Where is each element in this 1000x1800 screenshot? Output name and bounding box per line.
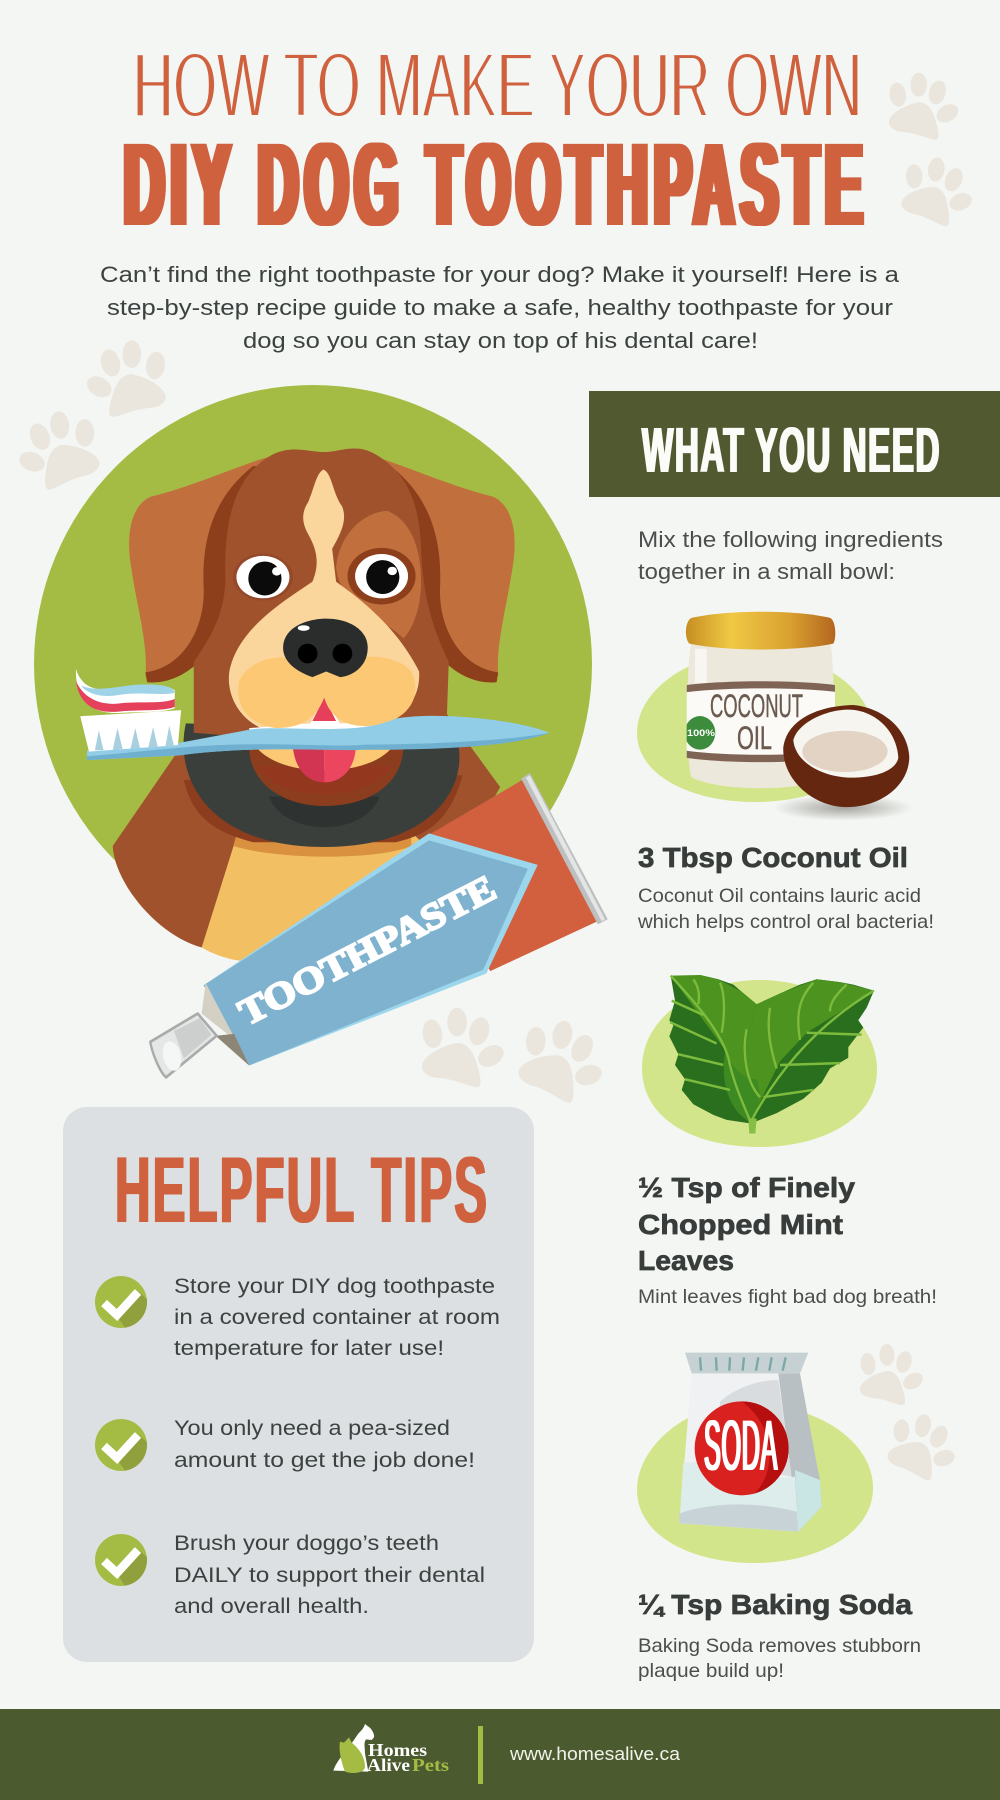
tip 1 text: in a covered container at room	[174, 1306, 500, 1329]
ingredient: mint text: Leaves	[638, 1245, 734, 1276]
toothbrush	[76, 669, 550, 760]
decorative paw prints	[10, 73, 980, 1486]
footer	[0, 1709, 1000, 1800]
tube shoulder	[202, 983, 249, 1065]
green blob	[637, 1403, 873, 1563]
logo: Homes	[368, 1740, 427, 1760]
dog chest	[202, 832, 435, 973]
ingredient: mint text	[638, 1172, 937, 1308]
dog head	[194, 448, 449, 738]
panel: what you need banner	[589, 391, 1000, 497]
tube blue label	[204, 833, 538, 1065]
jar label	[685, 681, 835, 762]
panel: helpful tips	[63, 1107, 534, 1662]
intro text: Can’t find the right toothpaste for your dog? Make it yourself! Here is a	[100, 262, 900, 287]
jar lid	[686, 612, 835, 649]
tip 2 check icon	[95, 1419, 147, 1471]
tube label text: TOOTHPASTE	[232, 868, 503, 1034]
ingredient: baking soda text	[638, 1589, 921, 1682]
right leaf	[743, 979, 874, 1124]
ingredient: baking soda text: ¼ Tsp Baking Soda	[638, 1589, 912, 1620]
tube red body	[411, 779, 597, 971]
nose	[283, 619, 368, 677]
green circle behind dog	[34, 385, 592, 943]
collar	[184, 723, 459, 847]
tube crimp	[521, 773, 608, 924]
tube cap	[150, 1014, 217, 1077]
collar shadow	[233, 832, 411, 857]
dog body	[113, 714, 500, 948]
intro text	[100, 262, 900, 353]
left eye	[236, 556, 289, 598]
toothpaste on brush	[76, 669, 175, 713]
coconut shadow	[773, 795, 913, 821]
green blob	[642, 980, 877, 1147]
icon: coconut oil: OIL	[737, 720, 772, 756]
right eye	[355, 554, 408, 598]
icon: baking soda: SODA	[704, 1407, 778, 1486]
ingredient: coconut oil text	[637, 842, 934, 933]
bag side	[777, 1373, 822, 1532]
tongue	[293, 745, 356, 782]
right eye patch	[336, 511, 421, 638]
tip 3 text: and overall health.	[174, 1595, 369, 1618]
icon: baking soda	[637, 1353, 873, 1563]
intro text: dog so you can stay on top of his dental care!	[243, 328, 758, 353]
crimp ticks	[700, 1357, 786, 1371]
helpful tips heading: HELPFUL TIPS	[115, 1137, 489, 1242]
under-collar shade	[184, 775, 463, 842]
toothpaste tube	[150, 773, 608, 1077]
tip 1 text: Store your DIY dog toothpaste	[174, 1275, 495, 1298]
coconut	[783, 705, 909, 807]
ears	[129, 457, 515, 682]
logo: Pets	[412, 1755, 449, 1775]
ingredient: mint text: Chopped Mint	[638, 1209, 843, 1240]
tip 3 text	[174, 1532, 485, 1618]
mouth	[249, 697, 399, 742]
mix instructions	[638, 527, 943, 584]
logo	[333, 1724, 449, 1775]
ingredient: baking soda text: plaque build up!	[638, 1660, 784, 1682]
tip 3 check icon	[95, 1534, 147, 1586]
bag front	[679, 1373, 798, 1532]
ingredient: baking soda text: Baking Soda removes stubborn	[638, 1635, 921, 1657]
website: www.homesalive.ca	[509, 1743, 681, 1764]
mint stem	[748, 1119, 757, 1134]
green blob	[637, 652, 873, 802]
toothbrush bristles	[80, 710, 181, 752]
blaze and muzzle	[229, 469, 419, 733]
icon: coconut oil: 100%	[687, 728, 715, 738]
icon: coconut oil	[637, 612, 913, 821]
ingredient: mint text: ½ Tsp of Finely	[638, 1172, 855, 1203]
collar centre shade	[269, 797, 380, 827]
tip 2 text: You only need a pea-sized	[174, 1417, 450, 1440]
ingredient: coconut oil text: which helps control oral bacteria!	[637, 911, 934, 933]
icon: mint leaves	[642, 975, 877, 1147]
mix instructions: Mix the following ingredients	[638, 527, 943, 552]
red badge	[695, 1401, 789, 1495]
tip 3 text: Brush your doggo’s teeth	[174, 1532, 439, 1555]
jaw	[253, 742, 395, 771]
intro text: step-by-step recipe guide to make a safe, healthy toothpaste for your	[107, 295, 893, 320]
mix instructions: together in a small bowl:	[638, 559, 895, 584]
teeth	[285, 733, 366, 751]
ingredient: mint text: Mint leaves fight bad dog breath!	[638, 1286, 937, 1308]
tip 3 text: DAILY to support their dental	[174, 1564, 485, 1587]
leaf veins	[670, 976, 874, 1122]
dog illustration	[76, 448, 550, 973]
title	[124, 33, 869, 251]
tip 2 text	[174, 1417, 475, 1472]
neck shadow	[249, 738, 404, 806]
jar body	[687, 644, 834, 788]
tip 1 text	[174, 1275, 500, 1360]
tip 1 check icon	[95, 1276, 147, 1328]
ingredient: coconut oil text: 3 Tbsp Coconut Oil	[638, 842, 908, 873]
eye rings	[233, 548, 416, 604]
jar label text: COCONUT	[710, 688, 803, 724]
logo: Alive	[367, 1755, 410, 1775]
tip 1 text: temperature for later use!	[174, 1337, 444, 1360]
ingredient: coconut oil text: Coconut Oil contains lauric acid	[638, 885, 921, 907]
muzzle cheeks	[238, 657, 415, 728]
bag crimp	[685, 1353, 808, 1373]
centre leaf	[724, 1052, 760, 1122]
left leaf	[669, 975, 760, 1124]
tip 2 text: amount to get the job done!	[174, 1449, 475, 1472]
